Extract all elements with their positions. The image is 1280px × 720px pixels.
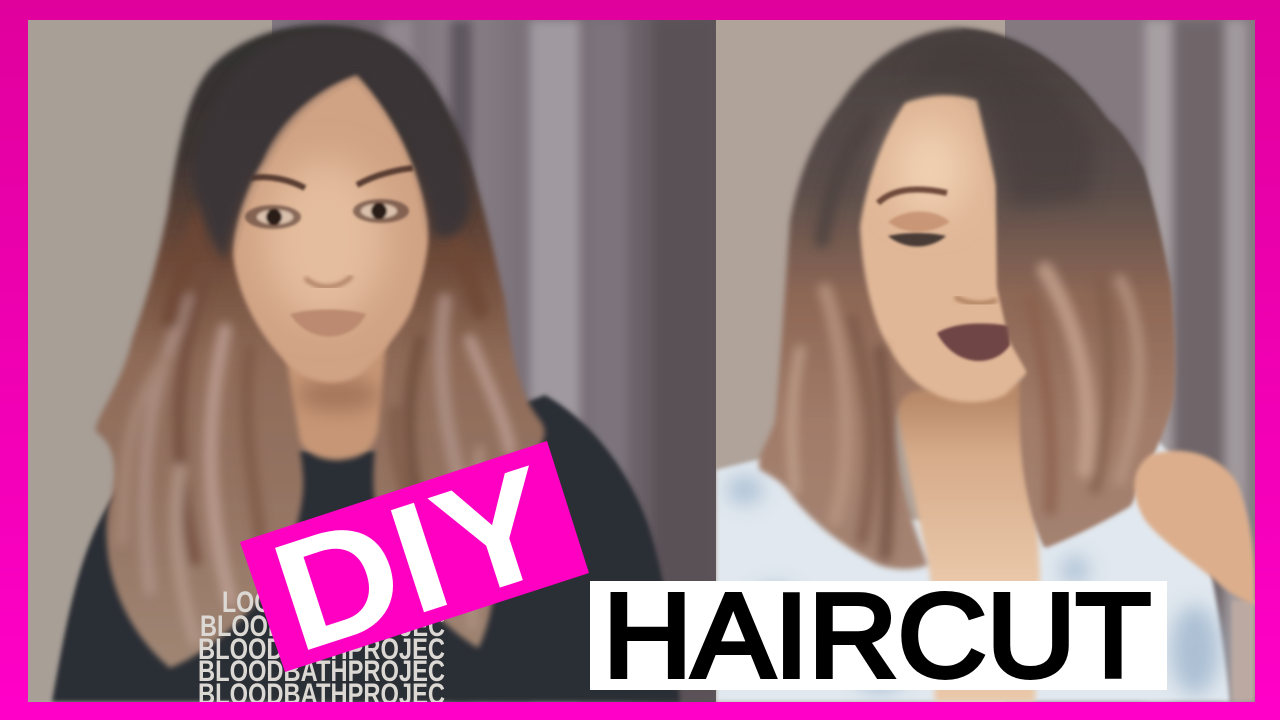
hair top front left bbox=[194, 30, 470, 262]
label: HAIRCUT: HAIRCUT bbox=[603, 570, 1151, 702]
eye and brow right bbox=[878, 189, 950, 246]
panel: right photo bbox=[716, 20, 1255, 702]
shirt print: LOODBATHPROJEC bbox=[222, 586, 447, 619]
hair side lock right bbox=[960, 30, 1174, 547]
panel: left photo bbox=[28, 20, 716, 711]
shirt print: BLOODBATHPROJEC bbox=[198, 633, 445, 666]
face highlight bbox=[265, 160, 385, 320]
face left bbox=[233, 74, 428, 382]
lips right bbox=[937, 324, 1010, 361]
eyes and brows left bbox=[245, 168, 413, 229]
neck and chest right bbox=[890, 380, 1040, 702]
woman left: hair back bbox=[96, 25, 545, 668]
face right bbox=[860, 95, 1028, 402]
lips left bbox=[290, 310, 366, 336]
curtain right bbox=[1005, 20, 1255, 702]
arm strip background bbox=[1232, 600, 1255, 702]
label: DIY: DIY bbox=[254, 433, 575, 686]
shirt print: BLOODBATHPROJEC bbox=[200, 610, 445, 643]
hair strands right bbox=[792, 120, 1139, 555]
neck left bbox=[284, 346, 388, 464]
shirt print bbox=[200, 591, 444, 702]
hair strands left bbox=[122, 210, 510, 640]
wall background left bbox=[28, 20, 272, 702]
hair right back bbox=[759, 28, 1174, 569]
hand right bbox=[1134, 451, 1255, 605]
neck shadow bbox=[296, 379, 380, 411]
curtain left bbox=[272, 20, 716, 702]
dark hair roots right bbox=[964, 97, 1090, 210]
face highlight right bbox=[895, 125, 965, 215]
nose shadow right bbox=[955, 297, 997, 303]
black t-shirt bbox=[52, 395, 680, 702]
nose left bbox=[305, 276, 352, 287]
shirt print: BLOODBATHPROJEC bbox=[198, 678, 445, 711]
denim mottling bbox=[727, 476, 1219, 695]
shirt print: BLOODBATHPROJEC bbox=[198, 655, 445, 688]
wall background right bbox=[716, 20, 1005, 702]
denim shirt bbox=[716, 435, 1230, 702]
